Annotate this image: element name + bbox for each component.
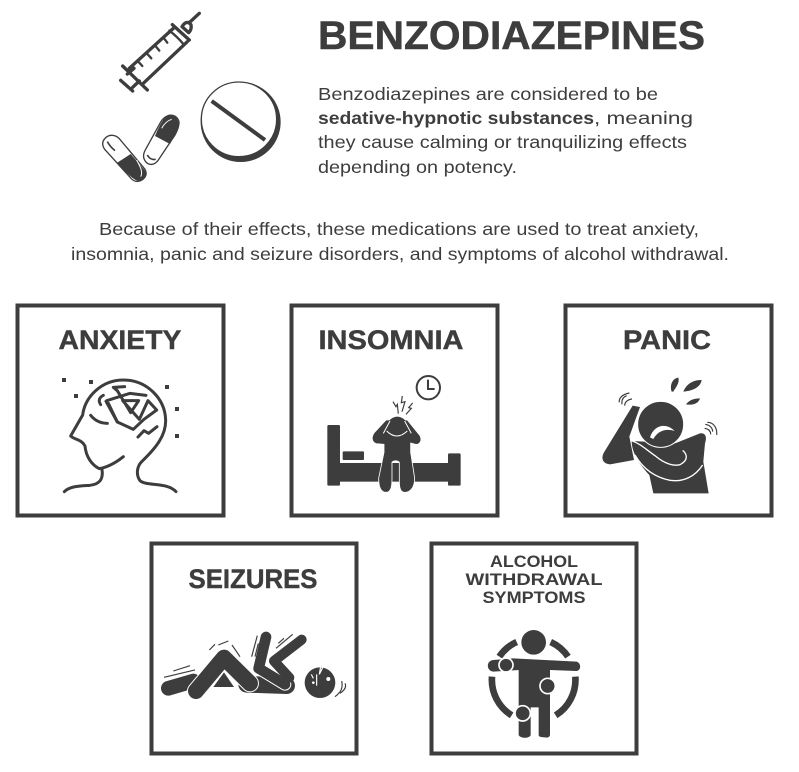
heading: panic: PANIC: [623, 325, 711, 355]
icon: syringe: [121, 13, 199, 91]
icon: capsule left: [103, 135, 146, 181]
text block: uses: [71, 219, 729, 264]
text block: intro: depending on potency.: [318, 157, 517, 177]
panel: insomnia: [292, 306, 498, 516]
heading: alcohol withdrawal symptoms: SYMPTOMS: [482, 588, 586, 607]
text block: uses: Because of their effects, these medications are used to treat anxiety,: [99, 219, 699, 239]
heading: anxiety: ANXIETY: [58, 325, 182, 355]
icon: body with pain points: [488, 630, 580, 738]
heading: alcohol withdrawal symptoms: [466, 552, 602, 607]
panel: seizures: [152, 544, 356, 754]
text block: intro: Benzodiazepines are considered to be: [318, 84, 658, 104]
icon: person having a seizure: [164, 634, 346, 698]
heading: insomnia: INSOMNIA: [318, 325, 464, 355]
icon: person sitting on bed: [327, 376, 461, 492]
icon: capsule right: [144, 115, 179, 164]
icon: anxiety dots: [62, 378, 179, 438]
heading: alcohol withdrawal symptoms: ALCOHOL: [490, 552, 578, 571]
panel: alcohol withdrawal symptoms: [432, 544, 636, 754]
text block: intro: sedative-hypnotic substances: [318, 108, 594, 128]
icon: round tablet: [201, 82, 281, 162]
text block: uses: insomnia, panic and seizure disorders, and symptoms of alcohol withdrawal.: [71, 244, 729, 264]
heading: seizures: SEIZURES: [188, 564, 318, 594]
icon: panicking figure: [602, 378, 717, 493]
panel: panic: [566, 306, 772, 516]
heading: alcohol withdrawal symptoms: WITHDRAWAL: [466, 570, 602, 589]
text block: intro: [318, 84, 693, 177]
icon: head with tangled thoughts: [64, 380, 176, 492]
text block: intro: , meaning: [594, 108, 693, 128]
title: BENZODIAZEPINES: [318, 14, 705, 58]
text block: intro: they cause calming or tranquilizing effects: [318, 132, 687, 152]
panel: anxiety: [18, 306, 224, 516]
